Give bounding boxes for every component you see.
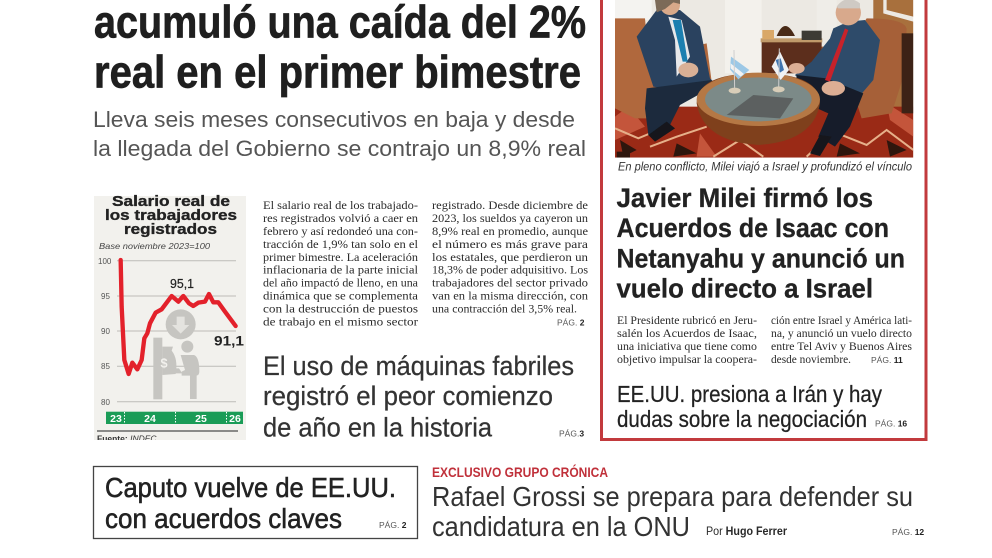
article text: Milei, right column: entre Tel Aviv y Buenos Aires: [771, 340, 912, 353]
chart axis labels: 85: [101, 362, 110, 371]
chart grid lines: [117, 261, 236, 402]
page ref: 12: PÁG. 12: [892, 527, 924, 537]
photo right armchair: [858, 18, 906, 118]
subheadline: Lleva seis meses consecutivos en baja y desde: [93, 107, 575, 132]
headline: EE.UU. Irán: EE.UU. presiona a Irán y hay: [617, 381, 882, 407]
article text: salario real, left column: tracción de 1,9% tan solo en el: [263, 238, 418, 251]
page ref: 11: PÁG. 11: [871, 355, 903, 365]
photo sideboard: [761, 26, 822, 73]
article text: salario real, left column: con la destrucción de puestos: [263, 302, 419, 316]
article text: Milei, left column: [617, 314, 757, 366]
headline: máquinas fabriles: registró el peor comienzo: [263, 381, 553, 411]
photo carpet: [615, 103, 913, 158]
article text: salario real, right column: van en la misma dirección, con: [432, 290, 588, 302]
photo flags: [729, 48, 789, 94]
article text: Milei, left column: salén los Acuerdos de Isaac,: [617, 327, 757, 340]
headline: Rafael Grossi: candidatura en la ONU: [432, 511, 690, 542]
headline: Rafael Grossi: [432, 481, 913, 542]
article text: Milei, left column: El Presidente rubricó en Jeru-: [617, 314, 757, 327]
article text: salario real, left column: El salario real de los trabajado-: [263, 199, 418, 212]
headline: máquinas fabriles: de año en la historia: [263, 412, 493, 442]
headline: máquinas fabriles: El uso de máquinas fabriles: [263, 351, 574, 381]
Caputo headline: [105, 472, 396, 534]
headline: EE.UU. Irán: [617, 381, 882, 432]
photo Netanyahu figure: [789, 0, 880, 156]
icon: worker with falling wages: [153, 309, 199, 399]
callout box: Caputo: [94, 466, 418, 538]
article text: Milei, right column: ción entre Israel y América lati-: [771, 314, 912, 327]
photo coffee table: [697, 73, 820, 145]
article text: salario real, left column: primer bimestre. La aceleración: [263, 251, 418, 264]
headline: máquinas fabriles: [263, 351, 574, 442]
subheadline: [93, 107, 586, 161]
photo window frame: [873, 0, 913, 113]
page ref: 2: PÁG. 2: [379, 520, 407, 530]
article text: salario real, left column: febrero y así redondeó una con-: [263, 225, 418, 238]
chart axis labels: 100: [98, 257, 112, 266]
page ref: 2: PÁG. 2: [557, 318, 585, 328]
article text: Milei, left column: una iniciativa que tiene como: [617, 340, 757, 353]
photo Milei figure: [637, 0, 713, 142]
photo caption: En pleno conflicto, Milei viajó a Israel y profundizó el vínculo: [618, 162, 913, 174]
chart panel: salario real: [94, 194, 254, 446]
headline: EE.UU. Irán: dudas sobre la negociación: [617, 406, 867, 432]
headline: Javier Milei: Acuerdos de Isaac con: [616, 213, 889, 243]
article text: salario real, right column: 8,9% real en promedio, aunque: [432, 225, 588, 238]
article text: salario real, left column: de trabajo en el mismo sector: [263, 316, 418, 328]
headline: Javier Milei: [616, 183, 905, 304]
Caputo headline: Caputo vuelve de EE.UU.: [105, 472, 396, 503]
chart title: [105, 194, 237, 238]
article text: salario real, left column: res registrados volvió a caer en: [263, 212, 418, 225]
article text: salario real, right column: [432, 199, 588, 316]
kicker: exclusivo: EXCLUSIVO GRUPO CRÓNICA: [432, 463, 608, 480]
article text: Milei, left column: objetivo impulsar la coopera-: [617, 353, 757, 366]
chart source: Fuente: INDEC: [97, 434, 157, 444]
chart axis labels: 90: [101, 327, 110, 336]
article text: Milei, right column: na, y anunció un vuelo directo: [771, 327, 912, 340]
article text: salario real, right column: los estatales, que perdieron un: [432, 251, 588, 264]
headline: Javier Milei: vuelo directo a Israel: [616, 274, 873, 304]
chart title: los trabajadores: [105, 208, 237, 224]
article text: salario real, left column: del año impactó de lleno, en una: [263, 276, 418, 290]
chart axis labels: [98, 257, 112, 407]
main headline: [94, 0, 586, 98]
article text: salario real, left column: [263, 199, 419, 328]
article text: salario real, right column: trabajadores del sector privado: [432, 276, 588, 290]
article text: salario real, right column: 18,3% de poder adquisitivo. Los: [432, 264, 588, 276]
photo: Milei and Netanyahu: [615, 0, 913, 158]
year bar: [106, 412, 243, 425]
line chart: real wage: [121, 260, 236, 374]
year bar: 26: [229, 413, 241, 425]
chart axis labels: 80: [101, 398, 110, 407]
year bar: 24: [144, 413, 156, 425]
article text: salario real, right column: registrado. Desde diciembre de: [432, 199, 588, 212]
main headline: real en el primer bimestre: [94, 46, 581, 98]
year bar: 25: [195, 413, 207, 425]
photo wall and curtains: [615, 0, 913, 113]
article text: salario real, left column: dinámica que se complementa: [263, 290, 418, 302]
label: 95,1: 95,1: [170, 276, 194, 291]
Caputo headline: con acuerdos claves: [105, 503, 342, 534]
label: 91,1: 91,1: [214, 332, 244, 348]
byline: Por Hugo Ferrer: [706, 524, 787, 538]
headline: Javier Milei: Netanyahu y anunció un: [616, 244, 905, 274]
page ref: 16: PÁG. 16: [875, 418, 907, 428]
chart title: Salario real de: [112, 194, 230, 210]
year bar: 23: [110, 413, 122, 425]
chart source: [94, 431, 254, 446]
article text: Milei, right column: desde noviembre.: [771, 353, 851, 366]
headline: Rafael Grossi: Rafael Grossi se prepara para defender su: [432, 481, 913, 512]
photo left armchair: [615, 18, 712, 118]
subheadline: la llegada del Gobierno se contrajo un 8,9% real: [93, 136, 586, 161]
article text: salario real, left column: inflacionaria de la parte inicial: [263, 264, 418, 276]
page ref: 3: PÁG.3: [559, 428, 584, 438]
panel: milei frame: [602, 0, 926, 440]
article text: salario real, right column: 2023, los sueldos ya cayeron un: [432, 212, 588, 225]
icon: worker with falling wages: $: [160, 356, 168, 370]
article text: Milei, right column: [771, 314, 912, 366]
headline: Javier Milei: Javier Milei firmó los: [616, 183, 873, 213]
chart base note: Base noviembre 2023=100: [99, 241, 210, 251]
chart axis labels: 95: [101, 292, 110, 301]
article text: salario real, right column: una contracción del 3,5% real.: [432, 302, 577, 316]
chart title: registrados: [124, 222, 217, 238]
article text: salario real, right column: el número es más grave para: [432, 238, 588, 251]
